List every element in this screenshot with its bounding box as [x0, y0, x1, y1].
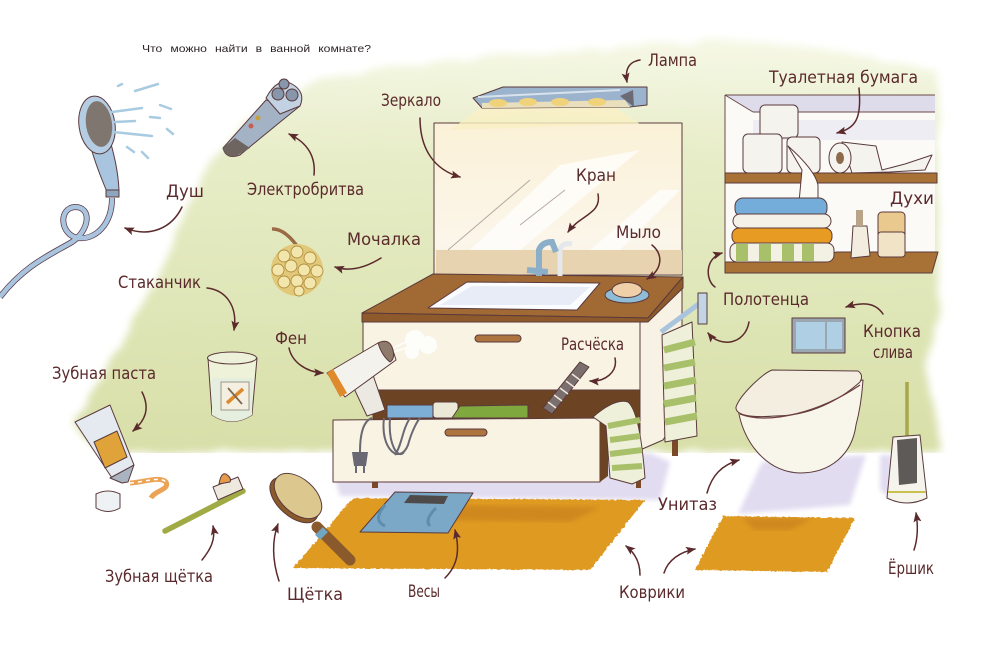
toilet label [658, 460, 739, 515]
title: Что можно найти в ванной комнате? [142, 43, 371, 55]
hairbrush label: Щётка [287, 585, 343, 605]
towel rail and hanging towel [661, 293, 707, 442]
floor cover [60, 453, 1000, 651]
shower label [125, 182, 204, 232]
hairbrush label [274, 524, 343, 605]
tap label: Кран [576, 166, 616, 186]
rug left [293, 498, 645, 570]
vanity unit [333, 274, 683, 488]
cup label [118, 273, 235, 330]
mirror [434, 123, 682, 275]
sponge [271, 229, 323, 296]
toothpaste [75, 405, 167, 512]
razor label [247, 134, 364, 200]
soap label: Мыло [616, 223, 661, 243]
toilet label: Унитаз [658, 495, 717, 515]
brush label: Ёршик [888, 558, 934, 579]
razor label: Электробритва [247, 180, 364, 200]
scales label [408, 530, 458, 602]
tap label [568, 166, 616, 232]
brush label [888, 513, 934, 579]
sponge label [335, 230, 421, 269]
flush label: Кнопка [863, 322, 921, 342]
floor shadows [335, 453, 892, 514]
folded towels [730, 198, 834, 262]
towels label: Полотенца [723, 290, 809, 310]
flush label: слива [873, 343, 913, 363]
comb label: Расчёска [561, 335, 624, 355]
dryer label [275, 329, 323, 373]
hairbrush [262, 465, 350, 560]
toilet [736, 370, 863, 473]
toothbrush [165, 474, 243, 531]
toilet paper label [768, 68, 918, 133]
rugs label [619, 546, 695, 603]
flush label [846, 304, 921, 363]
comb label [561, 335, 624, 381]
mirror label [381, 91, 460, 177]
toothbrush label [105, 526, 214, 587]
shower [0, 84, 173, 297]
dryer label: Фен [275, 329, 307, 349]
cup label: Стаканчик [118, 273, 201, 293]
toothbrush label: Зубная щётка [105, 567, 213, 587]
perfume label: Духи [890, 189, 934, 209]
razor [223, 79, 302, 156]
towel in drawer [593, 401, 645, 484]
towels label [708, 253, 809, 342]
soap [605, 282, 649, 303]
lamp [450, 87, 647, 130]
sponge label: Мочалка [347, 230, 421, 250]
rug right [695, 516, 855, 572]
shower label: Душ [166, 182, 204, 202]
hair dryer [327, 330, 437, 416]
scales [360, 492, 473, 533]
shelves [725, 95, 938, 273]
scales label: Весы [408, 582, 440, 602]
toilet paper [743, 105, 932, 213]
rugs label: Коврики [619, 583, 685, 603]
comb [543, 362, 589, 414]
toilet paper label: Туалетная бумага [768, 68, 918, 88]
toothpaste label: Зубная паста [52, 364, 156, 384]
lamp label: Лампа [648, 51, 697, 71]
flush button [792, 318, 845, 353]
cord and plug [352, 418, 420, 473]
soap label [616, 223, 661, 279]
wall background [72, 41, 942, 452]
lamp label [626, 51, 697, 82]
tap [527, 242, 572, 276]
glass [208, 352, 257, 422]
mirror label: Зеркало [381, 91, 441, 111]
toothpaste label [52, 364, 156, 431]
perfume [851, 210, 905, 258]
toilet brush [887, 382, 927, 503]
